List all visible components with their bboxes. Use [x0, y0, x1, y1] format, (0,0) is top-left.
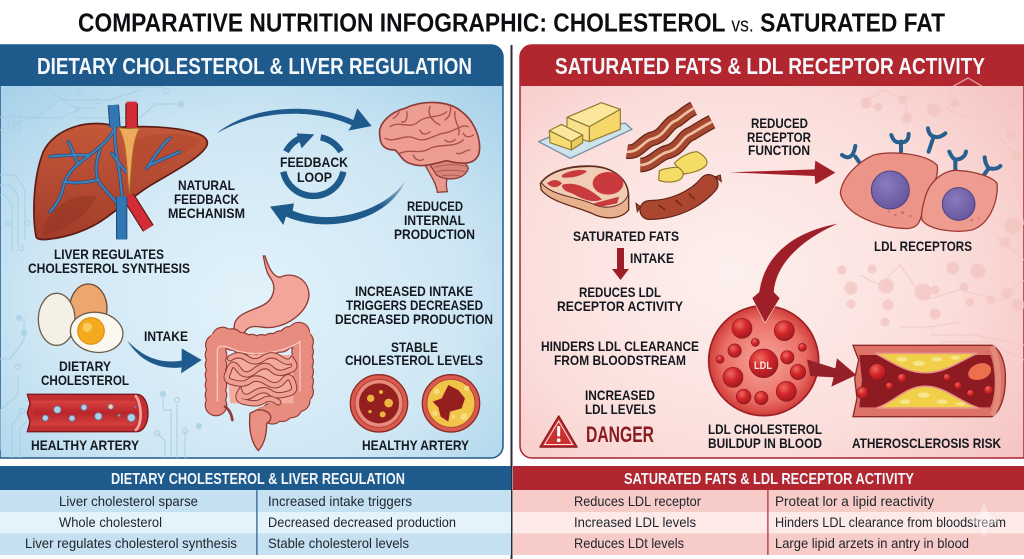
- large intestine bumps: [216, 333, 303, 415]
- circuit background pattern: [0, 87, 202, 458]
- row 1 left: Liver cholesterol sparse: [59, 493, 198, 509]
- label: reduced internal production: INTERNAL: [404, 212, 465, 228]
- label: liver regulates cholesterol synthesis: LIVER REGULATES: [54, 246, 164, 262]
- label: natural feedback mechanism: [168, 177, 245, 221]
- yolk: [78, 318, 104, 344]
- table heading: DIETARY CHOLESTEROL & LIVER REGULATION: [111, 471, 405, 488]
- label: danger: DANGER: [586, 422, 654, 447]
- table heading: SATURATED FATS & LDL RECEPTOR ACTIVITY: [624, 471, 915, 488]
- ligament: [118, 127, 140, 194]
- rectum: [250, 410, 271, 451]
- label: stable cholesterol levels: CHOLESTEROL LEVELS: [345, 352, 483, 368]
- row 3 left: Reduces LDt levels: [574, 535, 684, 551]
- cerebrum: [380, 102, 480, 166]
- cross section with plaque: [422, 375, 480, 432]
- cerebellum: [430, 159, 468, 179]
- label: increased LDL levels: [585, 387, 656, 417]
- center divider: [510, 45, 512, 559]
- row 2 right: Decreased decreased production: [268, 514, 456, 530]
- panel background: [520, 45, 1024, 458]
- nuclei: [871, 171, 909, 209]
- small intestine outline: [227, 355, 294, 403]
- artery wall: [27, 394, 148, 432]
- panel heading: DIETARY CHOLESTEROL & LIVER REGULATION: [37, 53, 472, 79]
- top plaque: [875, 353, 977, 373]
- row 2 left: Whole cholesterol: [59, 514, 162, 530]
- icon: cheese chunks: [659, 152, 707, 182]
- label: hinders LDL clearance: HINDERS LDL CLEARANCE: [541, 338, 699, 354]
- label: intake: INTAKE: [144, 328, 188, 344]
- red vessel: [128, 103, 148, 228]
- label: increased intake triggers decreased production: INCREASED INTAKE: [355, 283, 473, 299]
- row 1 right: Increased intake triggers: [268, 493, 412, 509]
- label: natural feedback mechanism: MECHANISM: [168, 205, 245, 221]
- label: hinders LDL clearance: [541, 338, 699, 368]
- icon: atherosclerosis artery: [853, 345, 1005, 417]
- row 3 left: Liver regulates cholesterol synthesis: [25, 535, 237, 551]
- label: increased intake triggers decreased production: [335, 283, 493, 327]
- label: feedback loop: [280, 154, 348, 185]
- label: reduced internal production: REDUCED: [407, 198, 463, 214]
- icon: LDL buildup circle: [709, 306, 819, 416]
- icon: sparkle watermark: [968, 501, 1000, 537]
- row 1 right: Proteat lor a lipid reactivity: [775, 493, 934, 509]
- label: LDL cholesterol buildup: [708, 421, 822, 451]
- liver body: [34, 123, 207, 240]
- blue veins: [50, 127, 180, 212]
- label: healthy artery left: HEALTHY ARTERY: [31, 437, 140, 453]
- table: saturated fats: [513, 466, 1024, 555]
- opening rim: [992, 347, 998, 415]
- label: atherosclerosis risk: ATHEROSCLEROSIS RISK: [852, 435, 1001, 451]
- icon: liver: [34, 102, 207, 240]
- label: reduced receptor function: [747, 115, 811, 158]
- row 3 right: Stable cholesterol levels: [268, 535, 409, 551]
- panel background: [0, 45, 503, 458]
- label: increased intake triggers decreased production: DECREASED PRODUCTION: [335, 311, 493, 327]
- label: reduced receptor function: RECEPTOR: [747, 129, 811, 145]
- label: reduces LDL receptor activity: RECEPTOR ACTIVITY: [557, 298, 684, 314]
- label: reduced internal production: PRODUCTION: [394, 226, 475, 242]
- table header: [0, 466, 511, 490]
- icon: sausage: [636, 175, 721, 212]
- label: increased intake triggers decreased production: TRIGGERS DECREASED: [346, 297, 483, 313]
- label: reduced receptor function: FUNCTION: [748, 142, 810, 158]
- icon: artery cross sections: [350, 375, 480, 432]
- icon: LDL receptor cells: [840, 128, 1000, 231]
- label: increased LDL levels: LDL LEVELS: [585, 401, 656, 417]
- arrow: intake: [127, 341, 202, 373]
- label: reduces LDL receptor activity: REDUCES LDL: [579, 284, 661, 300]
- brain stem: [425, 163, 450, 192]
- row 1 left: Reduces LDL receptor: [574, 493, 701, 509]
- label: feedback loop: FEEDBACK: [280, 154, 348, 170]
- column divider: [767, 490, 768, 555]
- artery lumen: [31, 401, 140, 425]
- icon: stomach and intestines: [216, 256, 309, 451]
- label: increased LDL levels: INCREASED: [585, 387, 655, 403]
- table: dietary cholesterol: [0, 466, 511, 555]
- butter slice: [549, 124, 583, 142]
- arrow: liver to brain: [217, 108, 372, 133]
- label: stable cholesterol levels: STABLE: [391, 339, 438, 355]
- row 2 right: Hinders LDL clearance from bloodstream: [775, 514, 1006, 530]
- gallbladder: [68, 213, 94, 227]
- label: reduced receptor function: REDUCED: [751, 115, 808, 131]
- icon: feedback loop ring: [283, 133, 343, 196]
- appendix: [225, 407, 232, 420]
- left cell: [840, 153, 937, 229]
- row 3 right: Large lipid arzets in antry in blood: [775, 535, 969, 551]
- table rows: [0, 490, 511, 512]
- label: LDL receptors: LDL RECEPTORS: [874, 238, 972, 254]
- cross section healthy: [350, 375, 408, 432]
- liver lobe shading: [132, 134, 202, 178]
- label: natural feedback mechanism: FEEDBACK: [174, 191, 239, 207]
- large intestine outline bumps: [216, 333, 303, 415]
- label: liver regulates cholesterol synthesis: [28, 246, 190, 276]
- panel header bar: [0, 45, 503, 86]
- molecule background pattern: [838, 78, 1024, 360]
- panel: dietary cholesterol and liver regulation: [0, 45, 503, 458]
- label: dietary cholesterol: [41, 358, 129, 388]
- label: liver regulates cholesterol synthesis: CHOLESTEROL SYNTHESIS: [28, 260, 190, 276]
- artery lumen: [859, 355, 995, 407]
- white egg: [38, 293, 75, 345]
- icon: healthy artery tube: [27, 394, 148, 432]
- arrow: to receptors: [730, 161, 835, 184]
- blood particles: [42, 404, 136, 422]
- icon: eggs: [38, 284, 126, 356]
- panel: saturated fats and LDL receptor activity: [520, 45, 1024, 458]
- brown egg: [70, 284, 107, 333]
- butter block: [567, 103, 620, 127]
- label: intake right: INTAKE: [630, 250, 674, 266]
- label: LDL cholesterol buildup: LDL CHOLESTEROL: [708, 421, 822, 437]
- label: hinders LDL clearance: FROM BLOODSTREAM: [554, 352, 686, 368]
- cerebellum folds: [435, 165, 467, 176]
- red cells: [857, 363, 993, 399]
- small intestine: [227, 355, 294, 403]
- label: saturated fats: SATURATED FATS: [573, 228, 679, 244]
- table header: [513, 466, 1024, 490]
- cut egg: [68, 309, 126, 356]
- arrow: curved to LDL buildup: [752, 223, 840, 323]
- right cell: [922, 170, 997, 231]
- label: healthy artery right: HEALTHY ARTERY: [362, 437, 470, 453]
- label: dietary cholesterol: CHOLESTEROL: [41, 372, 129, 388]
- label: reduces LDL receptor activity: [557, 284, 684, 314]
- arrow: buildup to artery: [807, 358, 856, 387]
- icon: brain: [380, 102, 480, 192]
- label: feedback loop: LOOP: [297, 169, 332, 185]
- label: reduced internal production: [394, 198, 475, 242]
- arrow: brain back to liver: [270, 178, 407, 225]
- arrow: down from saturated fats: [612, 248, 629, 280]
- bottom plaque: [877, 386, 979, 408]
- main blue vessel: [113, 105, 122, 239]
- circle body: [709, 306, 819, 416]
- label: LDL cholesterol buildup: BUILDUP IN BLOOD: [708, 435, 822, 451]
- artery outer wall: [853, 345, 1005, 417]
- small intestine backing: [227, 355, 293, 403]
- column divider: [256, 490, 258, 555]
- opening rim: [135, 395, 141, 431]
- title: COMPARATIVE NUTRITION INFOGRAPHIC: CHOLESTEROL vs. SATURATED FAT: [78, 8, 945, 38]
- panel header bar: [520, 45, 1024, 86]
- icon: steak: [540, 166, 629, 218]
- row 2 left: Increased LDL levels: [574, 514, 696, 530]
- table rows: [513, 490, 1024, 512]
- LDL particles: [716, 318, 806, 405]
- icon: butter: [539, 103, 632, 158]
- large intestine band: [217, 342, 300, 402]
- plaque texture: [897, 356, 965, 406]
- label: dietary cholesterol: DIETARY: [59, 358, 112, 374]
- icon: bacon: [627, 108, 712, 165]
- large intestine body: [216, 333, 303, 415]
- icon: danger triangle: [540, 416, 577, 447]
- blue veins dark outline: [50, 127, 180, 212]
- label: LDL in circle: LDL: [754, 360, 772, 372]
- label: natural feedback mechanism: NATURAL: [178, 177, 235, 193]
- cell granules: [888, 211, 980, 221]
- brain folds: [385, 106, 473, 160]
- butter dish: [539, 123, 632, 158]
- receptors: [842, 128, 1000, 180]
- plaque rupture: [968, 363, 991, 380]
- stomach: [234, 256, 309, 335]
- label: stable cholesterol levels: [345, 339, 483, 368]
